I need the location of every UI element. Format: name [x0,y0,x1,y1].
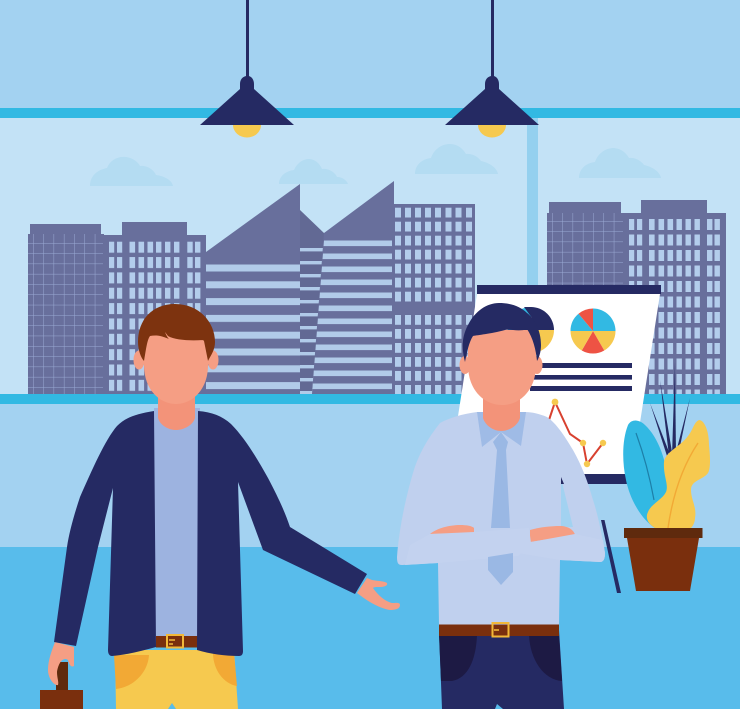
cloud 3 [415,144,498,174]
trouser pockets [114,653,237,689]
tie [488,432,513,585]
hands [430,525,575,542]
cloud 4 [579,148,661,178]
belt [439,623,559,636]
inner board leg [561,477,564,484]
shade [445,0,539,125]
hair [138,304,215,361]
neck [158,385,195,430]
plant [623,362,710,591]
collar [477,412,526,447]
line chart [549,399,606,467]
building E striped slant tower [312,181,394,394]
gap between arm and torso [561,478,573,527]
pie chart left [508,307,554,353]
board top bar [477,285,661,294]
skyline left [28,181,475,394]
yellow leaf [647,420,710,528]
ears [460,356,542,374]
building F window tower [393,204,475,394]
lamp left [200,0,294,138]
building D narrow tower [300,210,325,394]
undershirt [154,408,200,640]
board sheet [449,294,660,474]
window mullion [527,118,538,288]
face [468,330,536,405]
blue leaf [623,420,668,528]
right hand [357,578,400,610]
floor [0,547,740,709]
shirt [397,412,605,625]
bulb [478,112,506,138]
face [144,330,208,404]
cloud 2 [279,159,348,184]
building G grid tower [547,202,625,394]
pie chart right [570,308,616,354]
cloud 1 [90,157,173,186]
text lines [530,363,632,391]
ears [134,350,218,370]
pot [627,538,699,591]
board lower bar [560,474,628,484]
presentation board [449,285,661,593]
navy trousers [439,630,564,709]
lamp right [445,0,539,138]
man with jacket [40,304,400,709]
building A grid tower [28,224,104,394]
briefcase [40,662,83,709]
shade [200,0,294,125]
yellow trousers [115,650,238,709]
bulb [233,112,261,138]
building H window tower [623,200,726,394]
building B window tower [103,222,206,394]
belt [156,635,198,648]
pot rim [624,528,702,538]
clouds [90,144,661,186]
hair [463,303,541,362]
lower window frame band [0,394,740,404]
jacket [54,411,156,656]
neck [483,385,520,431]
skyline right [547,200,726,394]
plant spikes [650,362,690,456]
left hand [48,642,74,685]
building C striped slant tower [206,184,300,394]
board legs [601,520,621,593]
window glass [0,118,740,394]
trouser pockets [439,635,562,681]
man with crossed arms [397,303,605,709]
crossed forearms [405,528,531,565]
upper window frame band [0,108,740,118]
